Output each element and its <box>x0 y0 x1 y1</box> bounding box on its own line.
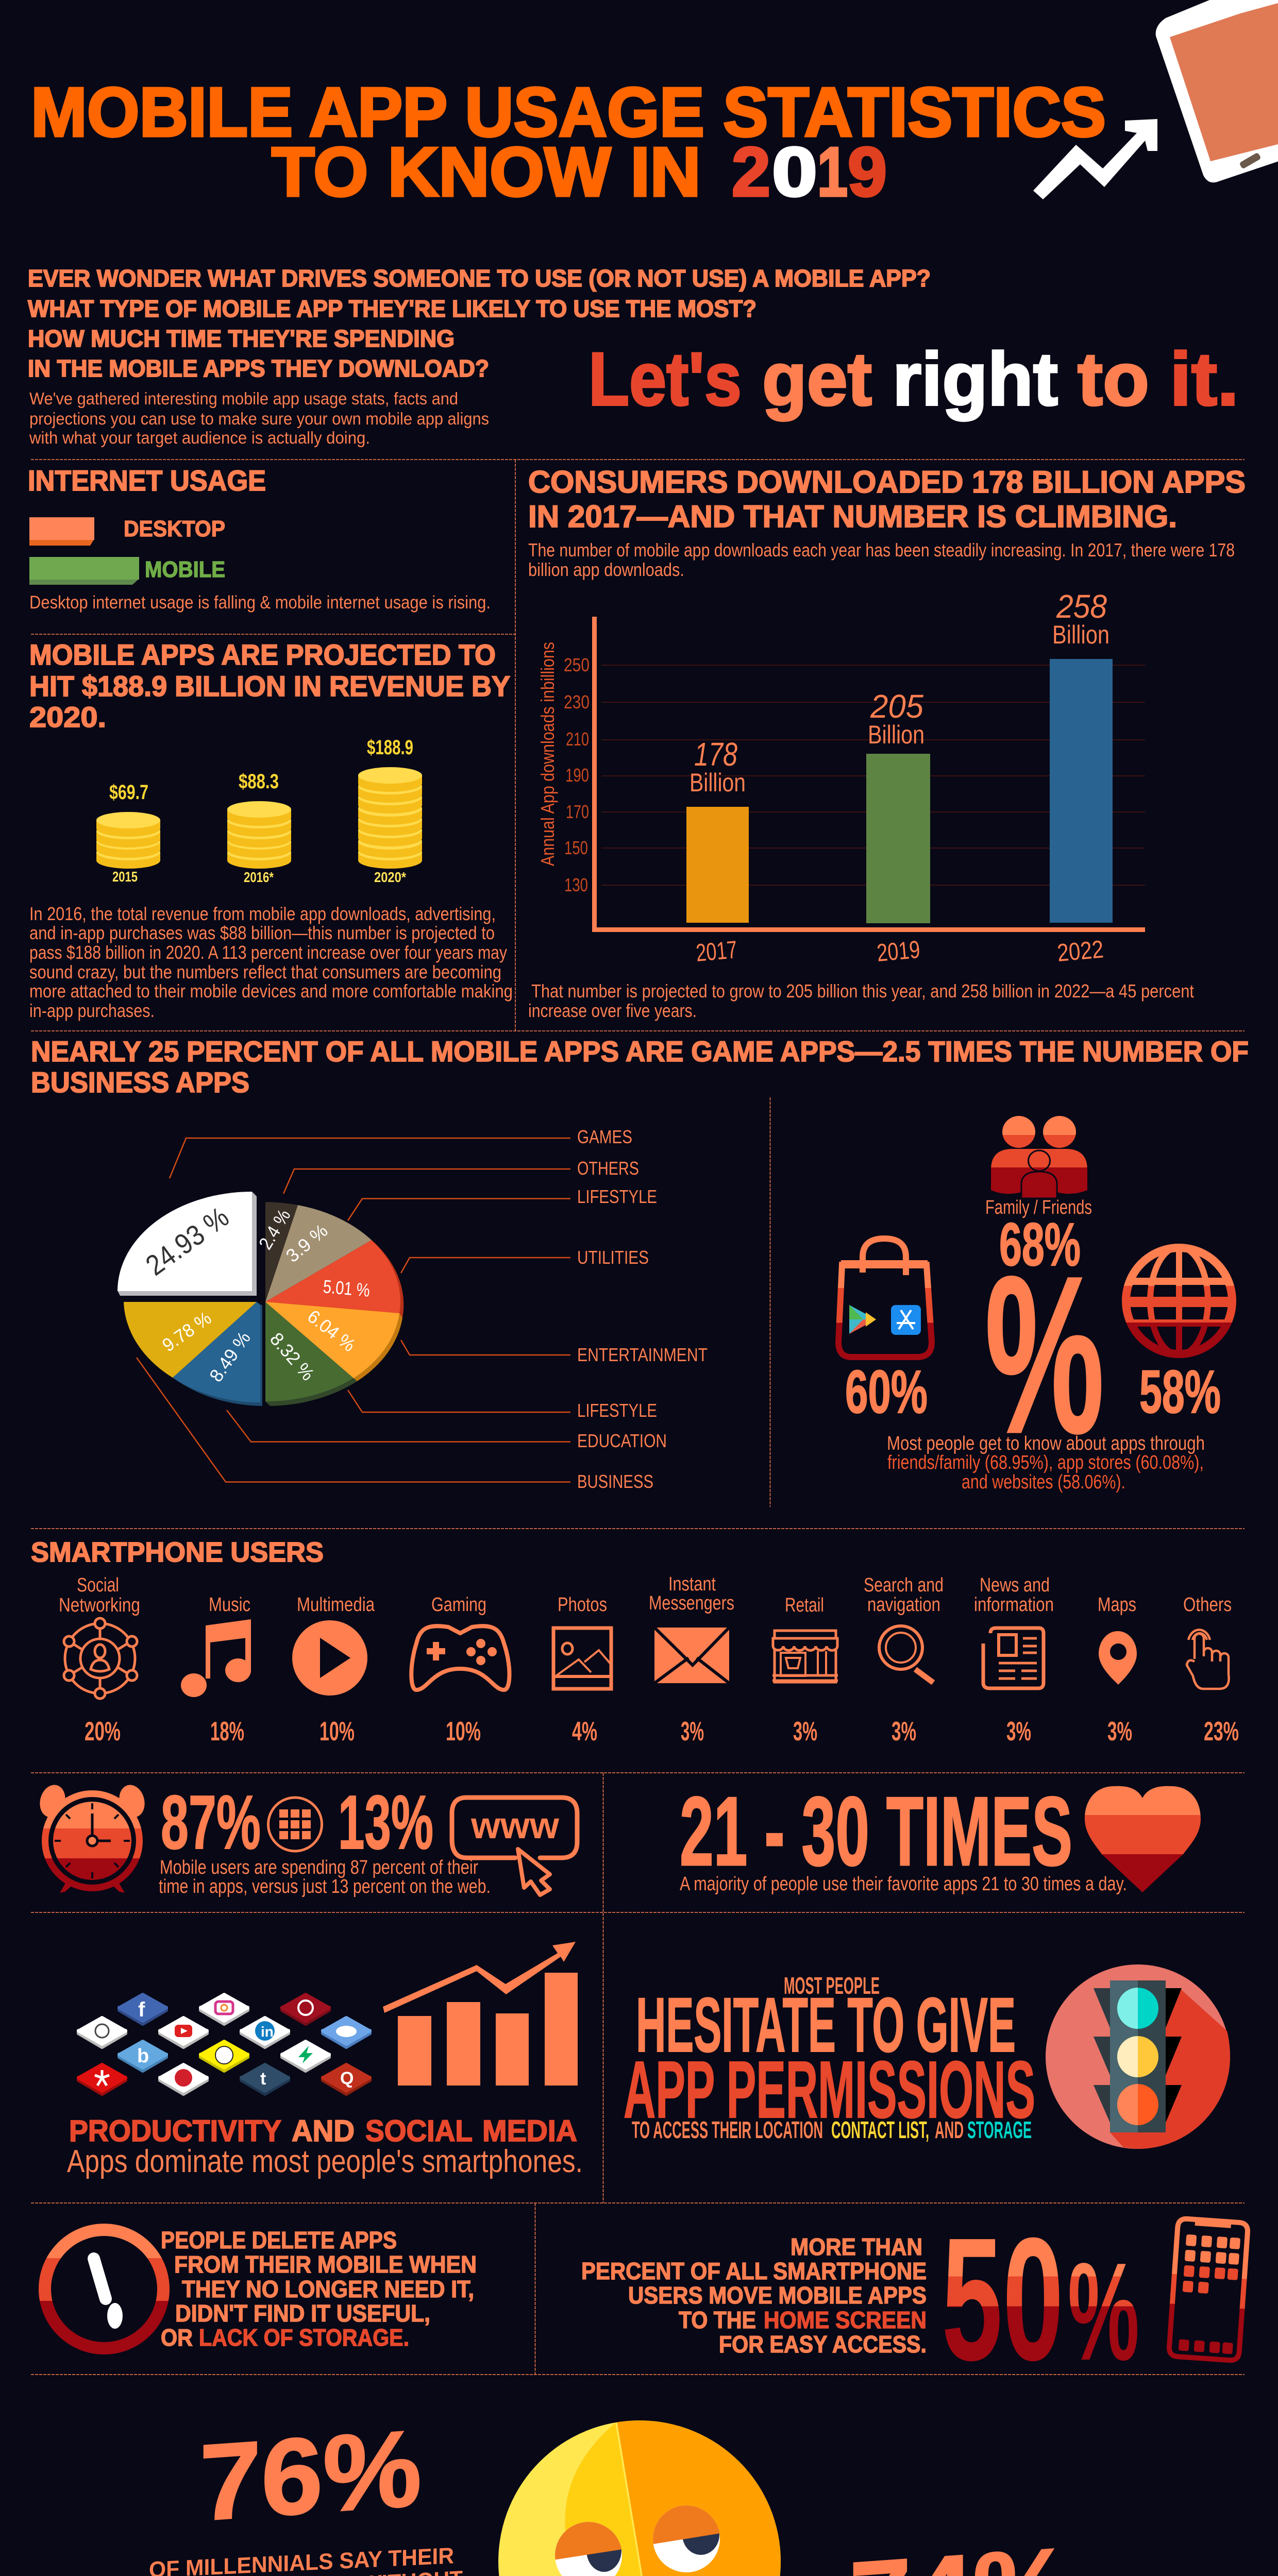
pie slice: business: 9.78 % <box>158 1307 215 1356</box>
text: home screen: PERCENT OF ALL SMARTPHONE <box>581 2258 927 2284</box>
category labels: information <box>974 1594 1054 1616</box>
category labels: Social <box>77 1574 119 1596</box>
smartphone usage percentages: 23% <box>1204 1717 1239 1747</box>
pie slice: games <box>117 1192 257 1296</box>
text: family friends stat: Family / Friends <box>985 1197 1092 1218</box>
social app diamonds: Q <box>340 2069 354 2088</box>
pie slice: others <box>255 1202 298 1302</box>
chart: rising bars with arrow <box>383 1942 578 2086</box>
bar chart: annual downloads: 210 <box>566 728 589 750</box>
smartphone usage percentages: 10% <box>446 1717 481 1747</box>
icon: instant messengers <box>654 1628 729 1683</box>
heading: game apps <box>31 1035 1249 1098</box>
text: home screen: USERS MOVE MOBILE APPS <box>628 2282 927 2309</box>
icon: app grid <box>268 1798 322 1851</box>
panel: home screen <box>581 2201 1248 2397</box>
title <box>31 73 1106 211</box>
heading: productivity and social media: SOCIAL <box>365 2114 473 2148</box>
pie leader lines and labels: BUSINESS <box>577 1471 653 1492</box>
title: 0 <box>772 133 817 211</box>
text: delete reasons <box>161 2227 477 2351</box>
category labels: navigation <box>867 1594 940 1616</box>
panel: 21 to 30 times <box>680 1777 1201 1895</box>
callout: let's get right to it: to <box>1078 337 1149 421</box>
bar chart: annual downloads: Annual App downloads inbillions <box>537 642 558 866</box>
text: websites stat: 58% <box>1139 1358 1221 1426</box>
category labels: Gaming <box>431 1594 486 1616</box>
pie slice: entertainment: 6.04 % <box>304 1306 360 1356</box>
bar chart: annual downloads: 2019 <box>876 936 921 967</box>
bar chart: annual downloads: 190 <box>565 765 589 786</box>
icon: social networking <box>64 1618 137 1699</box>
bar chart: annual downloads: 2022 <box>1056 936 1105 967</box>
icon: family friends <box>991 1116 1087 1198</box>
heading: hesitate to give app permissions: MOST PEOPLE <box>784 1972 880 1999</box>
icon: rising arrow <box>1033 119 1157 199</box>
text: downloads projection: increase over five years. <box>528 1000 697 1021</box>
category labels: Instant <box>668 1573 716 1595</box>
callout: let's get right to it: right <box>893 337 1058 421</box>
pie leader lines and labels: ENTERTAINMENT <box>577 1344 708 1365</box>
large percent sign: % <box>985 1230 1104 1480</box>
legend: mobile <box>29 557 225 585</box>
text: discovery note: and websites (58.06%). <box>962 1471 1125 1493</box>
text: downloads intro: billion app downloads. <box>528 559 684 580</box>
text: home screen: TO THE <box>679 2307 756 2333</box>
callout: let's get right to it: get <box>762 337 872 421</box>
stat: 13 percent: 13% <box>338 1780 433 1865</box>
category labels: News and <box>980 1574 1050 1596</box>
panel: app permissions <box>624 1964 1230 2149</box>
text: home screen <box>581 2233 927 2358</box>
heading: hesitate to give app permissions: CONTACT LIST, <box>831 2116 929 2143</box>
heading: revenue: MOBILE APPS ARE PROJECTED TO <box>29 638 496 671</box>
intro questions: EVER WONDER WHAT DRIVES SOMEONE TO USE (OR NOT USE) A MOBILE APP? <box>28 265 931 292</box>
social app diamonds: t <box>260 2069 266 2089</box>
pie slice: education <box>173 1302 262 1406</box>
chart: coin stack 2016: 2016* <box>244 869 274 885</box>
heading: internet usage: INTERNET USAGE <box>28 464 266 497</box>
icon: maps <box>1099 1631 1137 1685</box>
social app diamonds: b <box>137 2045 149 2067</box>
smartphone usage percentages: 3% <box>681 1717 704 1747</box>
intro paragraph: with what your target audience is actually doing. <box>29 428 370 447</box>
icon: shopping bag with app stores <box>838 1239 932 1357</box>
smartphone usage percentages: 20% <box>85 1717 121 1747</box>
icon: news <box>983 1628 1044 1688</box>
text: delete reasons: LACK OF STORAGE. <box>199 2324 409 2351</box>
text: time in apps note: time in apps, versus just 13 percent on the web. <box>159 1876 491 1897</box>
text: delete reasons: THEY NO LONGER NEED IT, <box>182 2276 474 2302</box>
heading: productivity and social media: MEDIA <box>482 2114 577 2148</box>
text: time in apps note: Mobile users are spending 87 percent of their <box>160 1857 478 1878</box>
heading: hesitate to give app permissions: TO ACCESS THEIR LOCATION <box>632 2116 823 2143</box>
panel: productivity and social media <box>67 1942 583 2179</box>
text: internet usage note: Desktop internet usage is falling & mobile internet usage is rising. <box>29 592 491 613</box>
panel: people delete apps <box>45 2227 477 2351</box>
heading: hesitate to give app permissions: STORAGE <box>967 2116 1032 2143</box>
icon: smartphone <box>1169 2218 1248 2361</box>
smartphone usage percentages: 10% <box>320 1717 355 1747</box>
social app diamonds: in <box>261 2024 274 2040</box>
text: home screen: FOR EASY ACCESS. <box>719 2331 927 2358</box>
pie leader lines and labels: UTILITIES <box>577 1247 649 1268</box>
text: app stores stat: 60% <box>845 1358 928 1426</box>
right eye <box>653 2505 720 2572</box>
smartphone usage percentages <box>85 1717 1239 1747</box>
heading: revenue: HIT $188.9 BILLION IN REVENUE BY <box>29 670 510 702</box>
bar chart: annual downloads: 250 <box>564 654 590 675</box>
intro questions <box>28 265 931 382</box>
callout: let's get right to it: Let's <box>588 337 742 421</box>
category labels: Retail <box>785 1595 824 1616</box>
pie chart: app categories <box>117 1192 403 1406</box>
chart: coin stack 2015: 2015 <box>112 869 138 885</box>
bar chart: annual downloads: Billion <box>868 720 924 749</box>
callout: let's get right to it <box>588 337 1239 421</box>
text: favorite apps note: A majority of people use their favorite apps 21 to 30 times a day. <box>680 1873 1127 1895</box>
icon: bored face <box>498 2420 781 2576</box>
heading: productivity and social media: PRODUCTIVITY <box>69 2114 281 2148</box>
legend: mobile: MOBILE <box>145 557 225 582</box>
title: TO KNOW IN <box>272 133 701 211</box>
pie slice: business <box>124 1302 257 1378</box>
smartphone usage percentages: 18% <box>210 1717 244 1747</box>
category labels: Others <box>1183 1594 1232 1616</box>
pie slice: utilities: 5.01 % <box>322 1276 371 1301</box>
text: revenue paragraph: and in-app purchases was $88 billion—this number is projected to <box>29 922 495 943</box>
intro questions: HOW MUCH TIME THEY'RE SPENDING <box>28 325 455 352</box>
heading: game apps: NEARLY 25 PERCENT OF ALL MOBILE APPS ARE GAME APPS—2.5 TIMES THE NUMBER OF <box>31 1035 1249 1067</box>
text: revenue paragraph <box>29 903 513 1021</box>
heading: revenue <box>29 638 510 733</box>
icon: alarm clock <box>37 1782 148 1893</box>
heading: productivity and social media: AND <box>292 2114 355 2148</box>
chart: coin stack 2020: $188.9 <box>367 736 413 759</box>
chart: coin stack 2015 <box>96 781 160 885</box>
pie leader lines and labels: LIFESTYLE <box>577 1186 657 1207</box>
icon: traffic light <box>1046 1964 1230 2149</box>
panel: revenue projection <box>29 638 513 1021</box>
icon: gaming <box>411 1626 509 1690</box>
pie leader lines and labels: LIFESTYLE <box>577 1400 657 1421</box>
heading: revenue: 2020. <box>29 701 106 733</box>
text: family friends stat: 68% <box>999 1211 1081 1279</box>
bar chart: annual downloads: 130 <box>564 874 588 895</box>
legend: desktop: DESKTOP <box>124 516 225 541</box>
category labels: Networking <box>59 1595 140 1616</box>
intro questions: IN THE MOBILE APPS THEY DOWNLOAD? <box>28 355 489 382</box>
stat: 76 percent of millennials: 76% <box>199 2407 422 2544</box>
icon: heart <box>1085 1786 1201 1892</box>
smartphone usage percentages: 3% <box>892 1717 916 1747</box>
panel: time in apps <box>37 1780 577 1897</box>
title: MOBILE APP USAGE STATISTICS <box>31 73 1106 151</box>
category labels: Music <box>209 1594 250 1616</box>
chart: coin stack 2016 <box>227 770 291 885</box>
icon: multimedia <box>292 1620 367 1696</box>
category labels: Search and <box>864 1574 944 1596</box>
text: family friends stat <box>985 1197 1092 1279</box>
stat: 50 percent: 50 <box>941 2201 1064 2397</box>
stat: 76 percent of millennials <box>143 2407 463 2576</box>
text: revenue paragraph: sound crazy, but the numbers reflect that consumers are becoming <box>29 961 501 982</box>
category labels <box>59 1573 1232 1616</box>
text: delete reasons: OR <box>161 2324 193 2351</box>
left eye <box>555 2522 622 2576</box>
chart: coin stack 2020: 2020* <box>374 869 406 885</box>
smartphone usage percentages: 3% <box>793 1717 817 1747</box>
icon: music <box>181 1619 251 1697</box>
bar chart: annual downloads: 2017 <box>695 936 738 967</box>
chart: coin stack 2020 <box>358 736 422 885</box>
bar chart: annual downloads: 230 <box>564 691 590 713</box>
smartphone usage percentages: 3% <box>1107 1717 1132 1747</box>
text: revenue paragraph: In 2016, the total revenue from mobile app downloads, advertising, <box>29 903 496 924</box>
text: revenue paragraph: pass $188 billion in 2020. A 113 percent increase over four years may <box>29 942 507 963</box>
text: home screen: MORE THAN <box>791 2233 922 2260</box>
category labels: Photos <box>558 1594 607 1616</box>
intro paragraph: projections you can use to make sure your own mobile app aligns <box>29 409 489 428</box>
chart: coin stack 2016: $88.3 <box>239 770 279 793</box>
icon: phone <box>1156 0 1278 182</box>
icon: search <box>879 1626 933 1683</box>
bar chart: annual downloads: Billion <box>690 768 746 797</box>
category labels: Messengers <box>649 1592 734 1614</box>
icon: globe <box>1123 1247 1235 1355</box>
text: downloads intro <box>528 539 1235 580</box>
chart: coin stack 2015: $69.7 <box>109 781 148 804</box>
smartphone usage percentages: 3% <box>1006 1717 1031 1747</box>
heading: hesitate to give app permissions <box>624 1972 1035 2143</box>
panel: app downloads <box>528 465 1246 1021</box>
pie slice: lifestyle <box>265 1205 372 1302</box>
category labels: Multimedia <box>297 1594 375 1616</box>
pie leader lines and labels <box>137 1126 708 1492</box>
heading: smartphone users: SMARTPHONE USERS <box>31 1537 324 1568</box>
social app diamonds <box>78 1994 370 2094</box>
pie leader lines and labels: GAMES <box>577 1126 632 1147</box>
heading: downloads: IN 2017—AND THAT NUMBER IS CLIMBING. <box>528 499 1177 534</box>
text: home screen: HOME SCREEN <box>764 2307 927 2333</box>
text: revenue paragraph: in-app purchases. <box>29 1000 155 1021</box>
pie slice: entertainment <box>265 1302 402 1381</box>
heading: game apps: BUSINESS APPS <box>31 1066 249 1098</box>
title: 2 <box>732 133 770 211</box>
panel: smartphone users <box>31 1537 1239 1747</box>
bar chart: annual downloads: 205 <box>870 688 923 725</box>
text: discovery note <box>887 1433 1205 1493</box>
intro questions: WHAT TYPE OF MOBILE APP THEY'RE LIKELY TO USE THE MOST? <box>28 295 756 322</box>
pie leader lines and labels: EDUCATION <box>577 1430 667 1451</box>
callout: let's get right to it: it. <box>1170 337 1239 421</box>
text: delete reasons: FROM THEIR MOBILE WHEN <box>174 2251 477 2278</box>
text: revenue paragraph: more attached to their mobile devices and more comfortable making <box>29 980 513 1002</box>
title: 9 <box>848 133 887 211</box>
pie slice: lifestyle two: 8.32 % <box>266 1328 318 1385</box>
pie slice: lifestyle: 3.9 % <box>282 1220 332 1266</box>
text: time in apps note <box>159 1857 491 1897</box>
text: delete reasons: DIDN'T FIND IT USEFUL, <box>175 2300 430 2327</box>
panel: internet usage <box>28 464 491 613</box>
pie slice: education: 8.49 % <box>205 1328 255 1386</box>
pie slice: utilities <box>265 1240 403 1318</box>
stat: 87 percent: 87% <box>161 1780 261 1865</box>
bar chart: annual downloads: Billion <box>1052 620 1109 649</box>
bar chart: annual downloads: 178 <box>694 736 737 773</box>
pie slice: others: 2.4 % <box>255 1206 295 1253</box>
text: delete reasons: PEOPLE DELETE APPS <box>161 2227 397 2253</box>
pie slice: games: 24.93 % <box>140 1200 234 1282</box>
intro paragraph: We've gathered interesting mobile app usage stats, facts and <box>29 389 458 408</box>
icon: retail <box>772 1631 838 1682</box>
icon: photos <box>552 1628 612 1689</box>
icon: www browser <box>452 1798 577 1895</box>
heading: downloads: CONSUMERS DOWNLOADED 178 BILLION APPS <box>528 465 1246 499</box>
text: discovery note: Most people get to know about apps through <box>887 1433 1205 1454</box>
pie leader lines and labels: OTHERS <box>577 1158 639 1179</box>
bar chart: annual downloads <box>537 588 1145 967</box>
pie slice: lifestyle two <box>265 1302 357 1406</box>
icon: www browser: www <box>470 1805 560 1846</box>
legend: desktop <box>29 516 225 546</box>
text: downloads projection <box>528 980 1194 1021</box>
bar chart: annual downloads: 150 <box>564 837 588 858</box>
category labels: Maps <box>1098 1594 1136 1616</box>
stat: 50 percent: % <box>1068 2234 1139 2389</box>
social app diamonds: f <box>138 1998 145 2021</box>
heading: downloads <box>528 465 1246 534</box>
bar chart: annual downloads: 258 <box>1056 588 1107 625</box>
text: discovery note: friends/family (68.95%), app stores (60.08%), <box>887 1452 1204 1473</box>
icon: exclamation <box>45 2230 163 2348</box>
heading: hesitate to give app permissions: AND <box>935 2116 964 2143</box>
title: 1 <box>817 133 848 211</box>
smartphone usage percentages: 4% <box>572 1717 597 1747</box>
intro paragraph <box>29 389 489 447</box>
bar chart: annual downloads: 170 <box>566 801 589 822</box>
heading: productivity and social media <box>69 2114 577 2148</box>
icon: others <box>1187 1630 1229 1689</box>
text: apps dominate: Apps dominate most people's smartphones. <box>67 2144 583 2179</box>
